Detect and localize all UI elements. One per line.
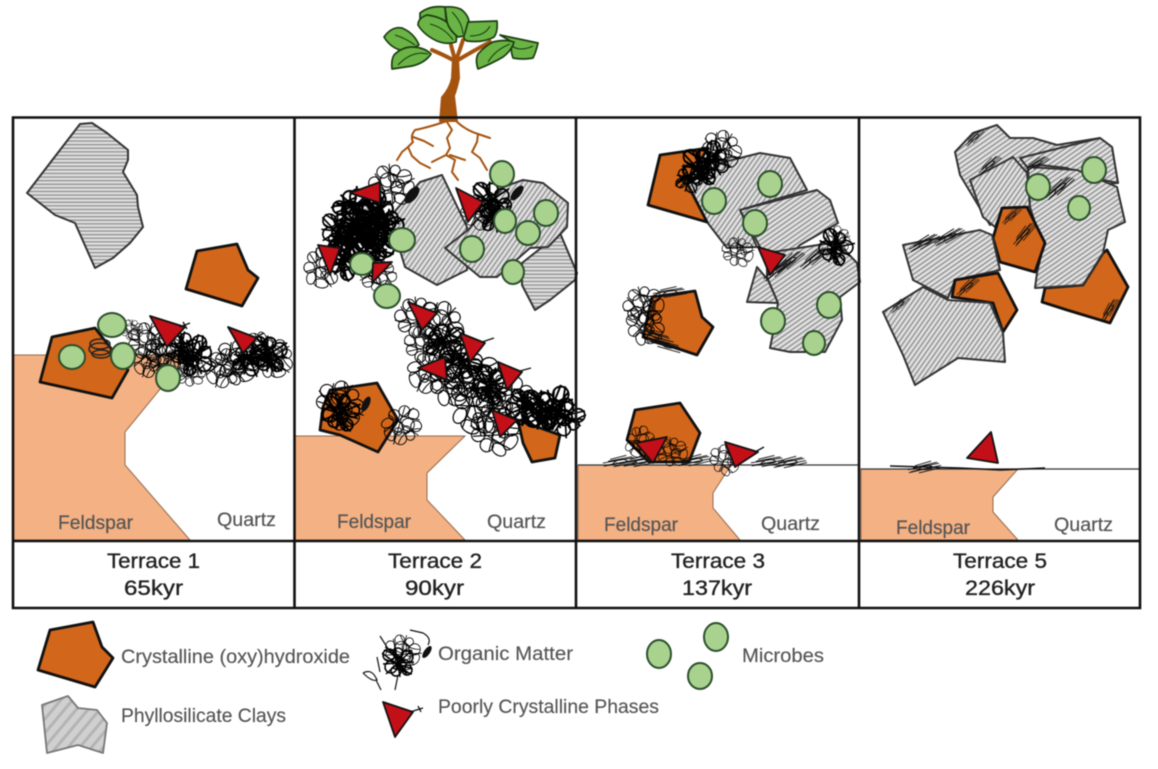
caption: Terrace 3: 137kyr	[682, 577, 752, 600]
crystalline oxyhydroxide	[320, 383, 560, 462]
legend: crystalline oxyhydroxide: Crystalline (oxy)hydroxide	[121, 647, 350, 668]
caption: Terrace 2: Terrace 2	[388, 550, 482, 573]
feldspar ground	[295, 436, 465, 540]
feldspar label: Feldspar	[58, 513, 134, 534]
quartz label: Quartz	[1054, 515, 1113, 536]
caption: Terrace 2	[388, 550, 482, 600]
feldspar label: Feldspar	[896, 518, 971, 539]
legend: poorly crystalline phases: Poorly Crystalline Phases	[438, 697, 659, 718]
legend: microbes	[647, 623, 824, 689]
poorly crystalline phases	[150, 316, 264, 353]
surface line	[578, 464, 858, 466]
legend: phyllosilicate clays: Phyllosilicate Clays	[121, 706, 286, 727]
caption: Terrace 3	[671, 550, 765, 600]
feldspar label: Feldspar	[337, 512, 412, 533]
poorly crystalline phase	[967, 432, 998, 463]
caption: Terrace 5: 226kyr	[965, 577, 1035, 600]
plant stem and branches	[432, 40, 490, 122]
feldspar ground	[861, 469, 1018, 540]
clay particles	[345, 175, 577, 310]
feldspar ground	[13, 355, 190, 540]
panel: Terrace 3	[578, 123, 860, 540]
surface line	[861, 468, 1140, 470]
legend: poorly crystalline phases	[383, 697, 659, 737]
organic matter	[89, 315, 295, 393]
legend: crystalline oxyhydroxide	[38, 622, 350, 687]
caption: Terrace 5	[953, 550, 1047, 600]
panel: Terrace 1	[13, 123, 295, 540]
terrace captions	[107, 550, 1047, 600]
caption: Terrace 3: Terrace 3	[671, 550, 765, 573]
crystalline oxyhydroxide upper	[186, 244, 258, 306]
caption: Terrace 1: 65kyr	[124, 577, 183, 600]
microbes	[59, 313, 180, 391]
caption: Terrace 2: 90kyr	[405, 577, 464, 600]
caption: Terrace 1: Terrace 1	[107, 550, 200, 573]
microbes	[350, 161, 558, 308]
quartz label: Quartz	[217, 510, 276, 531]
organic matter	[887, 128, 1122, 473]
clay particle	[27, 123, 143, 268]
legend: organic matter: Organic Matter	[438, 644, 574, 665]
organic matter	[301, 158, 590, 464]
residue along surface	[890, 466, 1045, 470]
caption: Terrace 1	[107, 550, 200, 600]
legend: phyllosilicate clays	[42, 696, 286, 753]
legend	[38, 622, 824, 753]
crystalline oxyhydroxide	[627, 148, 713, 462]
legend: microbes: Microbes	[742, 646, 824, 667]
caption: Terrace 5: Terrace 5	[953, 550, 1047, 573]
poorly crystalline phases	[636, 247, 785, 467]
legend: organic matter	[363, 628, 574, 690]
feldspar label: Feldspar	[604, 515, 679, 536]
table frame	[13, 118, 1140, 608]
feldspar ground	[578, 465, 740, 540]
microbes	[702, 171, 841, 355]
clay particles	[883, 125, 1128, 385]
plant roots	[397, 120, 490, 180]
quartz label: Quartz	[761, 514, 820, 535]
poorly crystalline phases	[318, 182, 531, 437]
organic matter	[603, 123, 858, 481]
clay particles	[687, 153, 860, 352]
panel: Terrace 2	[295, 158, 590, 540]
crystalline oxyhydroxide lower	[40, 328, 128, 398]
microbes	[1026, 157, 1106, 220]
panel: Terrace 5	[861, 125, 1140, 540]
plant leaves	[384, 7, 538, 69]
plant	[384, 7, 538, 180]
quartz label: Quartz	[487, 512, 546, 533]
